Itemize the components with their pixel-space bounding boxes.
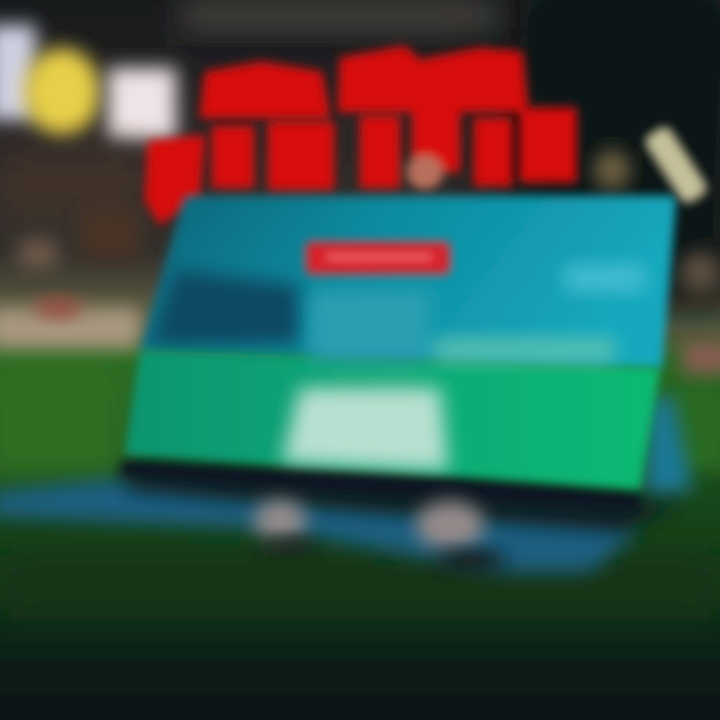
football boots (254, 500, 506, 571)
light teal text block (435, 338, 615, 362)
red label (306, 242, 450, 274)
screen bezel bottom (120, 460, 640, 508)
stadium floodlights (0, 25, 176, 140)
right side lights (594, 125, 720, 374)
center teal column (310, 290, 430, 360)
pale table panel (282, 388, 448, 470)
screen lower green area (125, 350, 660, 490)
laptop screen (125, 196, 676, 490)
keyboard base (0, 395, 692, 572)
crowd and stands (0, 150, 145, 348)
red blurred headline (145, 46, 576, 225)
dark left shading (150, 270, 300, 345)
right light patch (565, 265, 645, 291)
screen upper area (140, 196, 676, 368)
